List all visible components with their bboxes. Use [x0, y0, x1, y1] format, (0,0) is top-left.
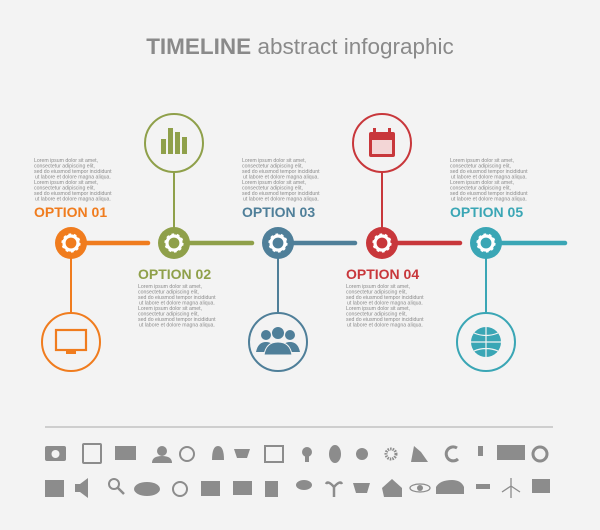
option 05: OPTION 05: [450, 204, 523, 220]
option 04: OPTION 04: [346, 266, 419, 282]
option 03: [242, 158, 355, 371]
icon row 2: [45, 478, 550, 498]
option 01: OPTION 01: [34, 204, 107, 220]
option 03: OPTION 03: [242, 204, 315, 220]
icon row 1: [45, 444, 547, 463]
option 02: OPTION 02: [138, 266, 211, 282]
option 02: [138, 114, 252, 328]
option 04: [346, 114, 460, 328]
option 01: [34, 158, 148, 371]
option 05: [450, 158, 565, 371]
title: TIMELINE abstract infographic: [146, 34, 454, 59]
